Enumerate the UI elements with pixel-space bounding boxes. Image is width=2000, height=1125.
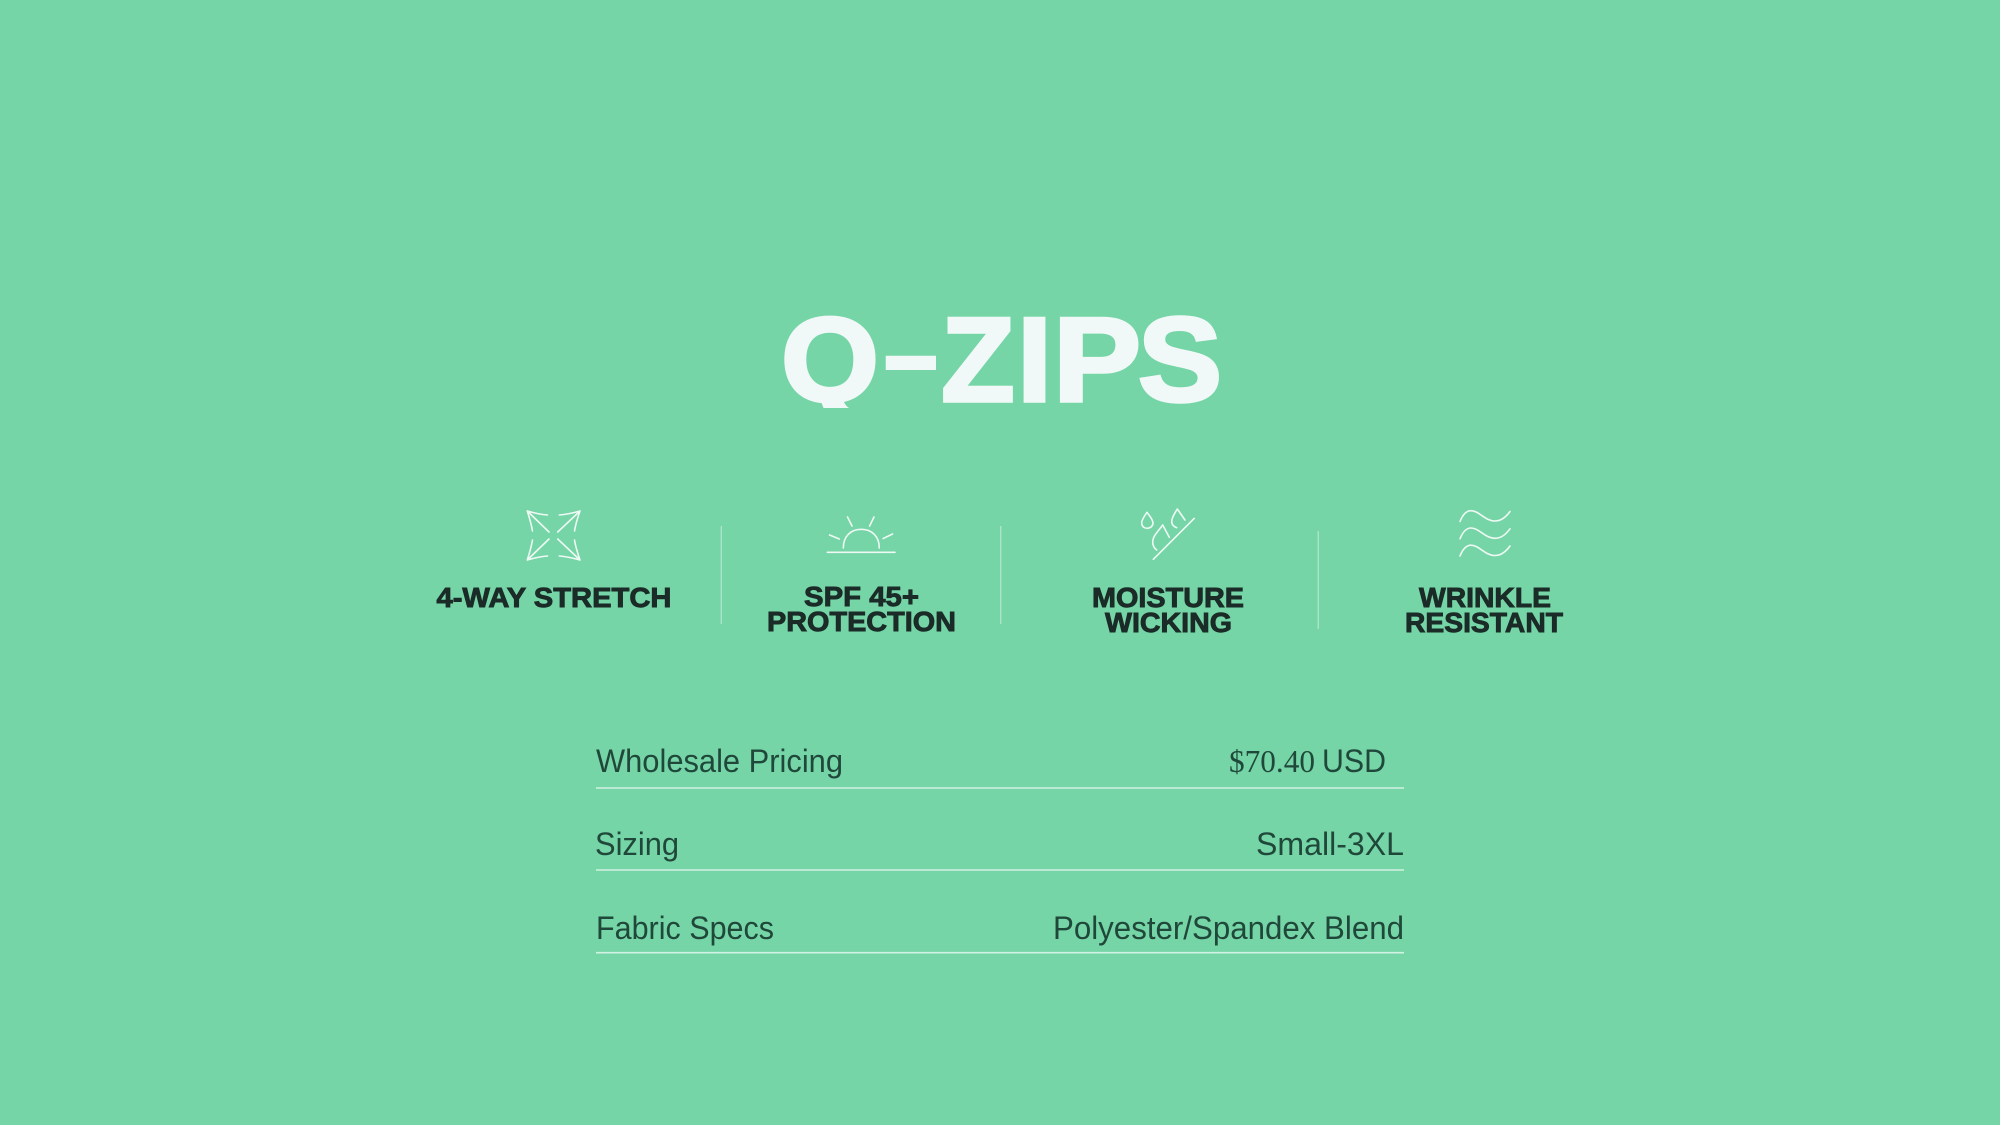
feature: moisture wicking — [1092, 509, 1244, 638]
spec row: wholesale pricing: Wholesale Pricing — [596, 743, 843, 779]
spec row: wholesale pricing — [596, 743, 1404, 788]
spec row: wholesale pricing: $70.40 — [1229, 743, 1315, 779]
label: SPF 45+ protection: PROTECTION — [767, 606, 956, 637]
feature: wrinkle resistant — [1405, 511, 1563, 638]
label: moisture wicking: MOISTURE — [1092, 582, 1244, 613]
label: moisture wicking: WICKING — [1105, 607, 1232, 638]
title: Q — [780, 293, 879, 427]
divider — [1317, 531, 1319, 629]
spec row: fabric specs — [596, 910, 1404, 953]
label: wrinkle resistant: RESISTANT — [1405, 607, 1563, 638]
label: wrinkle resistant: WRINKLE — [1419, 582, 1551, 613]
divider — [1000, 526, 1002, 624]
feature: 4-way stretch — [436, 511, 672, 613]
label: moisture wicking — [1092, 582, 1244, 638]
title: S — [1138, 293, 1222, 427]
icon: three waves — [1460, 511, 1510, 556]
label: wrinkle resistant — [1405, 582, 1563, 638]
title: - — [878, 286, 944, 420]
icon: rising sun — [827, 517, 895, 552]
spec row: fabric specs: Fabric Specs — [596, 910, 774, 946]
title: P — [1052, 293, 1141, 427]
title — [784, 286, 1222, 427]
title: I — [1017, 293, 1052, 427]
label: SPF 45+ protection — [767, 581, 956, 637]
label: 4-way stretch: 4-WAY STRETCH — [436, 582, 672, 613]
spec row: wholesale pricing: USD — [1322, 743, 1386, 779]
icon: water drops on slope — [1142, 509, 1194, 559]
label: SPF 45+ protection: SPF 45+ — [804, 581, 919, 612]
feature: SPF 45+ protection — [767, 517, 956, 637]
spec row: sizing: Sizing — [595, 826, 679, 862]
spec row: sizing — [595, 826, 1404, 870]
divider — [720, 526, 722, 624]
icon: four outward arrows — [527, 511, 580, 560]
spec row: sizing: Small-3XL — [1256, 826, 1404, 862]
spec row: fabric specs: Polyester/Spandex Blend — [1053, 910, 1404, 946]
title: Z — [941, 293, 1015, 427]
